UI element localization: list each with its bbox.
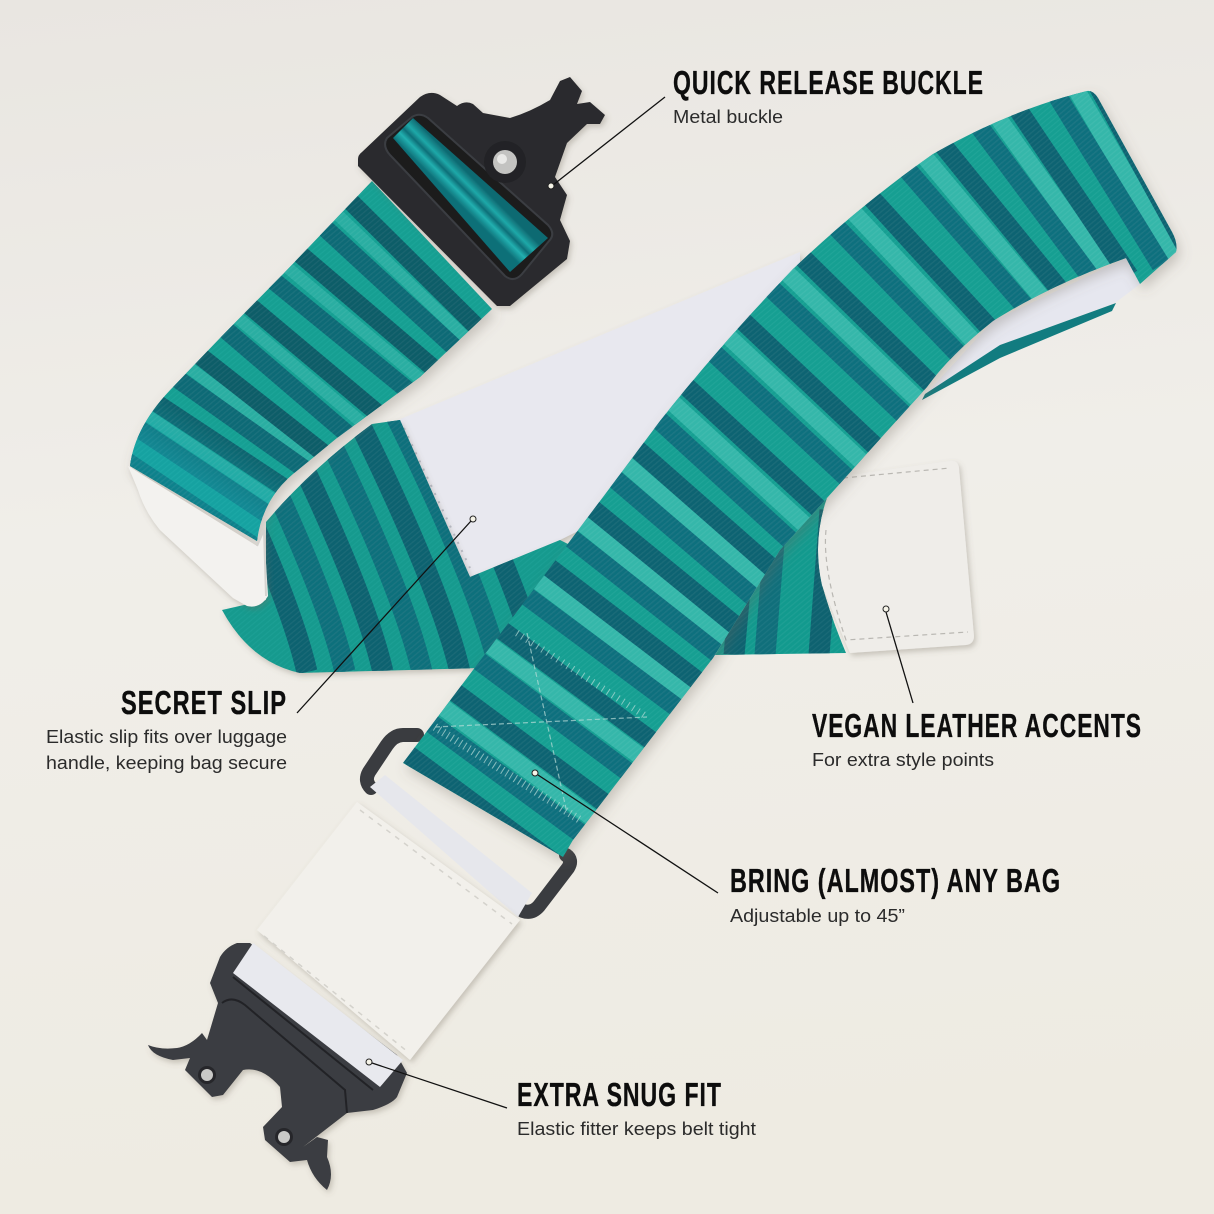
callout: bring almost any bag (532, 770, 1061, 926)
callout: extra snug fit (366, 1059, 756, 1139)
icon: top quick release buckle (358, 77, 605, 306)
callout: extra snug fit: Elastic fitter keeps belt tight (517, 1119, 756, 1139)
callout: secret slip: SECRET SLIP (121, 684, 287, 721)
panel: upper elastic section (370, 775, 532, 917)
panel: vegan leather accent (818, 461, 974, 653)
callout: vegan leather accents (812, 606, 1142, 770)
callout: secret slip (46, 516, 476, 773)
rivet (484, 141, 526, 183)
panel: white leather fold (128, 466, 268, 607)
icon: bottom quick release buckle (148, 943, 407, 1190)
panel: lower elastic fitter (233, 943, 403, 1087)
panel: lower slider bars (367, 735, 570, 912)
callout: extra snug fit: EXTRA SNUG FIT (517, 1076, 722, 1113)
callout: vegan leather accents: For extra style points (812, 750, 994, 770)
teal webbing roll (393, 118, 548, 272)
stitching (435, 633, 647, 820)
callout: secret slip: Elastic slip fits over luggage (46, 727, 287, 747)
panel: main long strap (395, 85, 1185, 885)
rivet left (198, 1066, 216, 1084)
panel: white elastic slip (398, 252, 800, 577)
panel: back strap under leather accent (715, 498, 846, 655)
panel: thin back strap and right white inside (922, 258, 1140, 400)
callout: quick release buckle: Metal buckle (673, 107, 783, 127)
callout: quick release buckle (548, 64, 984, 189)
callout: bring almost any bag: BRING (ALMOST) ANY BAG (730, 862, 1061, 899)
callout: secret slip: handle, keeping bag secure (46, 753, 287, 773)
panel: upper strap near top buckle (120, 170, 510, 550)
panel: back strap loop (222, 420, 568, 678)
callout: quick release buckle: QUICK RELEASE BUCKLE (673, 64, 984, 101)
panel: white leather midsection (257, 802, 520, 1060)
callout: bring almost any bag: Adjustable up to 45” (730, 906, 905, 926)
rivet right (275, 1128, 293, 1146)
